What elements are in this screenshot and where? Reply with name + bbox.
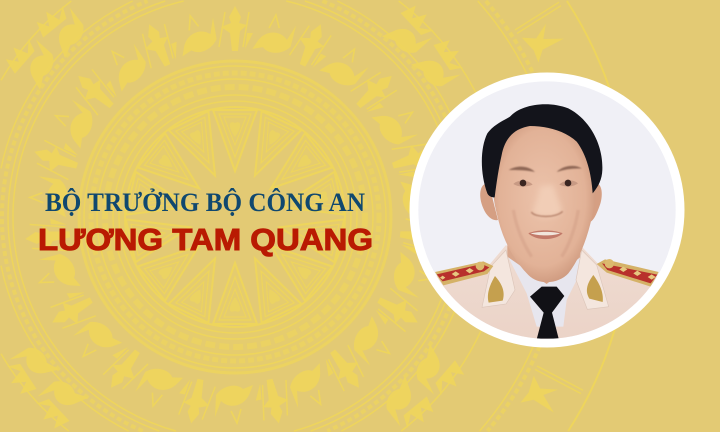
mouth — [528, 230, 563, 239]
portrait frame — [410, 72, 684, 348]
title: role: BỘ TRƯỞNG BỘ CÔNG AN — [45, 188, 365, 217]
eyes — [513, 180, 578, 187]
star rays — [126, 110, 344, 324]
eyebrows — [509, 167, 535, 172]
necktie — [530, 287, 564, 339]
uniform jacket — [430, 245, 663, 340]
photo backdrop — [418, 82, 676, 277]
face — [493, 121, 596, 282]
epaulette left — [435, 261, 493, 285]
collar badge left — [488, 276, 504, 303]
nose — [534, 186, 562, 216]
collar badge right — [587, 275, 603, 302]
neck — [507, 244, 580, 284]
ears — [480, 183, 498, 220]
portrait — [417, 80, 678, 340]
cheek shading — [513, 210, 578, 257]
shirt — [507, 254, 581, 327]
epaulette right — [597, 259, 659, 287]
collar tab left — [482, 250, 515, 307]
hair — [482, 104, 602, 197]
title: name: LƯƠNG TAM QUANG — [38, 222, 373, 257]
collar tab right — [576, 250, 609, 309]
